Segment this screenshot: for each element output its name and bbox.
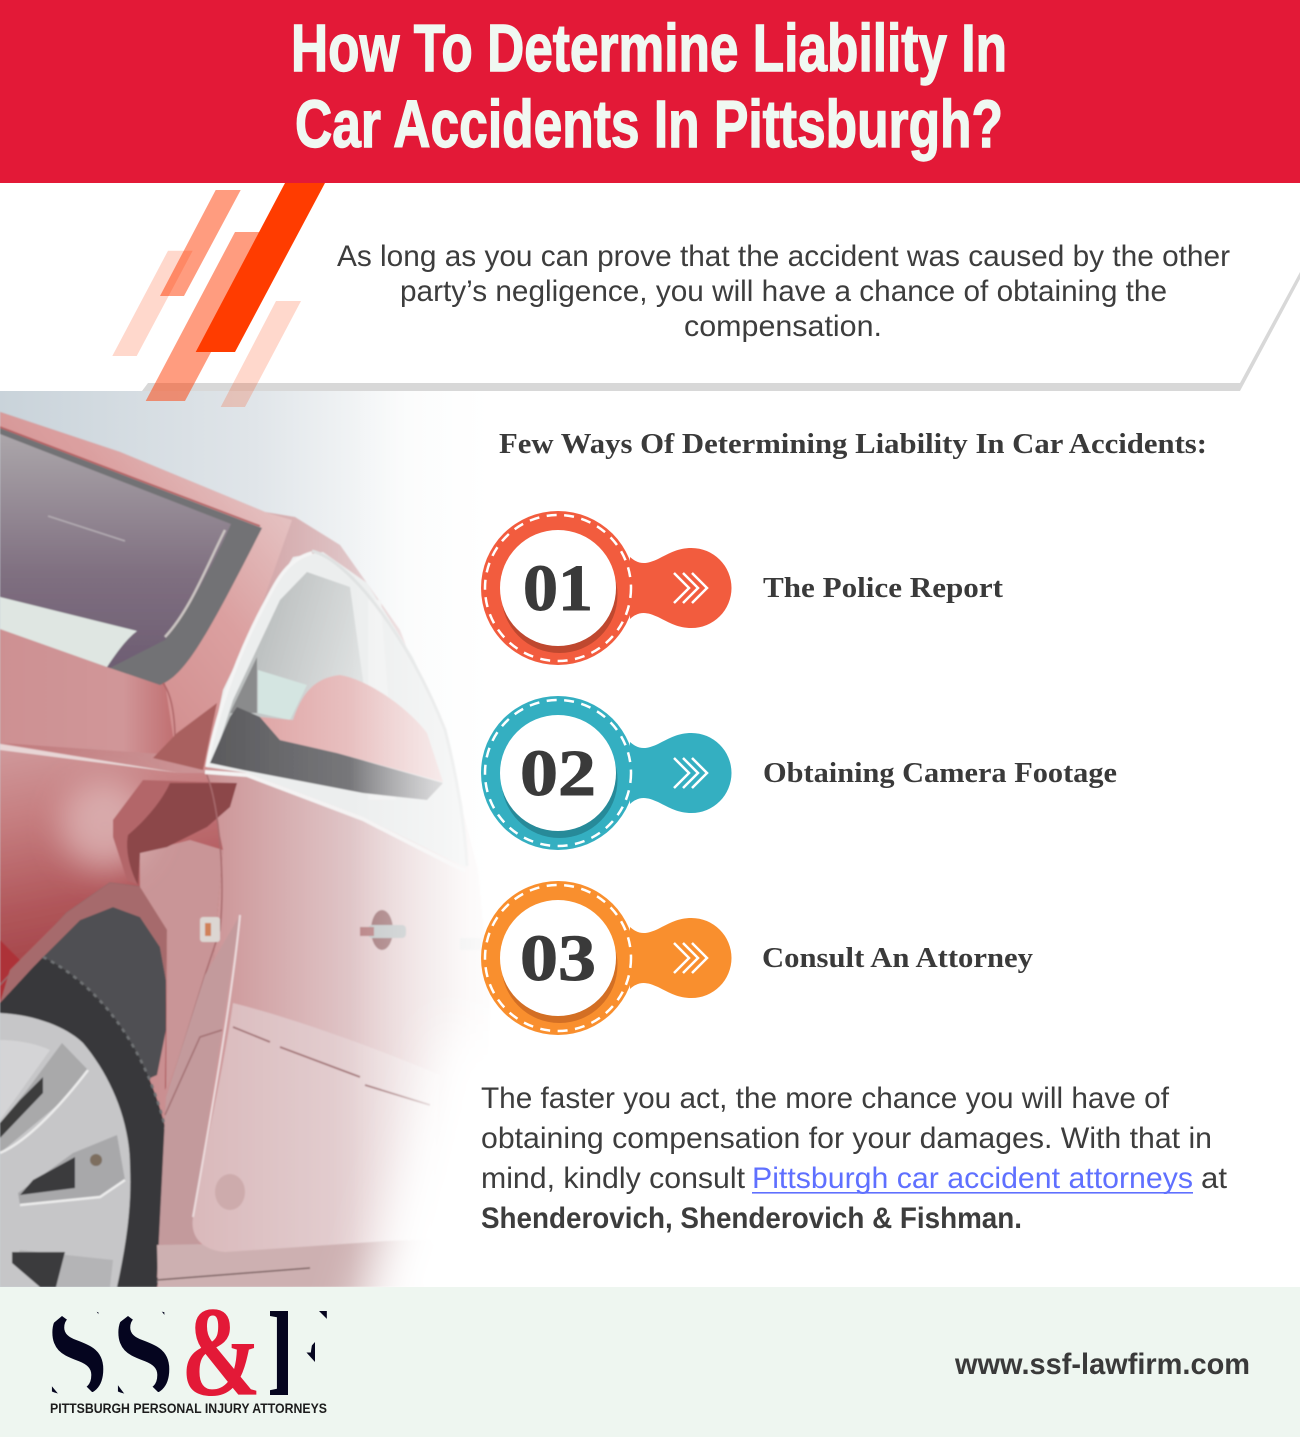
side window — [208, 552, 446, 847]
footer — [0, 1281, 1300, 1437]
closing paragraph — [481, 1082, 1228, 1235]
website URL: www.ssf-lawfirm.com — [954, 1348, 1250, 1381]
section heading: Few Ways Of Determining Liability In Car Accidents: — [499, 429, 1207, 460]
panel: intro ribbon — [112, 183, 1300, 407]
rim — [0, 1013, 130, 1287]
badge 03: 03 — [520, 922, 596, 995]
logo — [50, 1309, 327, 1413]
logo: PITTSBURGH PERSONAL INJURY ATTORNEYS — [50, 1401, 327, 1416]
door handle — [371, 910, 393, 950]
title banner: How To Determine Liability In — [291, 11, 1007, 86]
fender reflection — [153, 703, 217, 770]
closing paragraph: Shenderovich, Shenderovich & Fishman. — [481, 1202, 1022, 1235]
wheel arch — [12, 906, 167, 1078]
intro paragraph: compensation. — [684, 310, 882, 343]
badge 02 — [481, 696, 732, 850]
title banner — [0, 0, 1300, 183]
logo: & — [181, 1281, 261, 1423]
badge 03 — [481, 881, 732, 1035]
logo: S — [112, 1281, 174, 1423]
intro paragraph: As long as you can prove that the accident was caused by the other — [337, 240, 1230, 273]
closing paragraph: The faster you act, the more chance you will have of — [481, 1082, 1170, 1115]
label 01: The Police Report — [763, 572, 1003, 604]
title banner: Car Accidents In Pittsburgh? — [295, 87, 1003, 162]
side marker lamp — [200, 917, 220, 942]
list item 02 — [481, 696, 1117, 850]
panel: car photograph — [0, 391, 472, 1287]
door lower panel — [157, 915, 240, 1278]
badge 01: 01 — [523, 552, 593, 625]
red front fender patch — [0, 940, 20, 1002]
logo: F — [266, 1281, 332, 1423]
intro paragraph — [337, 240, 1230, 343]
badge 02: 02 — [520, 737, 596, 810]
closing paragraph: Pittsburgh car accident attorneys — [752, 1162, 1193, 1195]
intro paragraph: party’s negligence, you will have a chance of obtaining the — [400, 275, 1167, 308]
tyre — [0, 957, 170, 1287]
badge 01 — [481, 511, 732, 665]
logo: S — [46, 1281, 108, 1423]
decorative slanted stripes — [112, 183, 325, 407]
label 03: Consult An Attorney — [762, 942, 1034, 974]
closing paragraph: mind, kindly consult — [481, 1162, 746, 1195]
closing paragraph: at — [1201, 1162, 1228, 1195]
list item 03 — [481, 881, 1034, 1035]
list item 01 — [481, 511, 1003, 665]
closing paragraph: obtaining compensation for your damages. With that in — [481, 1122, 1212, 1155]
label 02: Obtaining Camera Footage — [763, 757, 1117, 789]
door seam — [190, 774, 224, 1020]
